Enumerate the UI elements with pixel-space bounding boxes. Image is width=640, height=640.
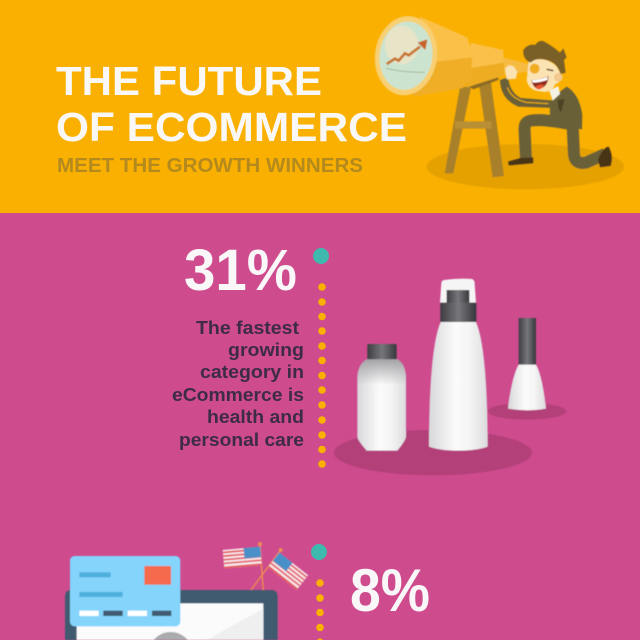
figure: businessman — [500, 41, 612, 167]
illustration: cosmetic bottles — [334, 279, 566, 475]
text block: fastest growing category: personal care — [179, 430, 304, 450]
suit jacket — [550, 87, 582, 129]
stat: 8%: 8% — [350, 557, 430, 624]
icon: left US flag — [223, 547, 262, 569]
icon: tripod — [445, 73, 504, 177]
icon: right US flag — [268, 553, 308, 590]
text block: fastest growing category: health and — [207, 407, 304, 427]
icon: laptop screen — [65, 590, 278, 640]
panel: pink body — [0, 213, 640, 640]
eye — [547, 69, 553, 71]
timeline marker: second stat — [311, 544, 327, 560]
back leg — [573, 125, 605, 163]
ground shadow — [427, 144, 624, 189]
hand — [505, 65, 517, 79]
icon: telescope — [370, 12, 529, 99]
stat: 31%: 31% — [184, 238, 297, 303]
front shoe — [508, 157, 533, 166]
text block: fastest growing category — [172, 318, 304, 450]
collar — [549, 86, 560, 101]
icon: nail polish bottle — [508, 318, 546, 410]
text block: fastest growing category: eCommerce is — [172, 385, 304, 405]
title: OF ECOMMERCE — [56, 104, 407, 150]
timeline dots: first stat — [318, 283, 326, 468]
icon: tall pump bottle — [429, 279, 488, 451]
text block: fastest growing category: growing — [228, 340, 304, 360]
illustration: businessman with telescope — [370, 12, 624, 189]
front leg — [525, 120, 570, 159]
bottle shadows — [334, 430, 532, 475]
text block: fastest growing category: The fastest — [196, 318, 299, 338]
icon: growth arrow chart — [387, 47, 420, 64]
mouth — [531, 76, 549, 89]
subtitle: MEET THE GROWTH WINNERS — [57, 155, 363, 177]
text block: fastest growing category: category in — [200, 362, 304, 382]
panel: header — [0, 0, 640, 213]
icon: crossed flag poles — [251, 544, 281, 591]
title — [56, 58, 407, 150]
back shoe — [598, 147, 612, 167]
hair — [523, 41, 567, 74]
illustration: laptop, card and flags — [65, 542, 308, 640]
icon: small round bottle — [357, 344, 406, 451]
head — [527, 59, 561, 92]
icon: credit card — [70, 556, 180, 626]
title: THE FUTURE — [56, 58, 322, 104]
timeline dots: second stat — [316, 579, 324, 640]
timeline marker: first stat — [313, 248, 329, 264]
arms — [500, 77, 554, 108]
